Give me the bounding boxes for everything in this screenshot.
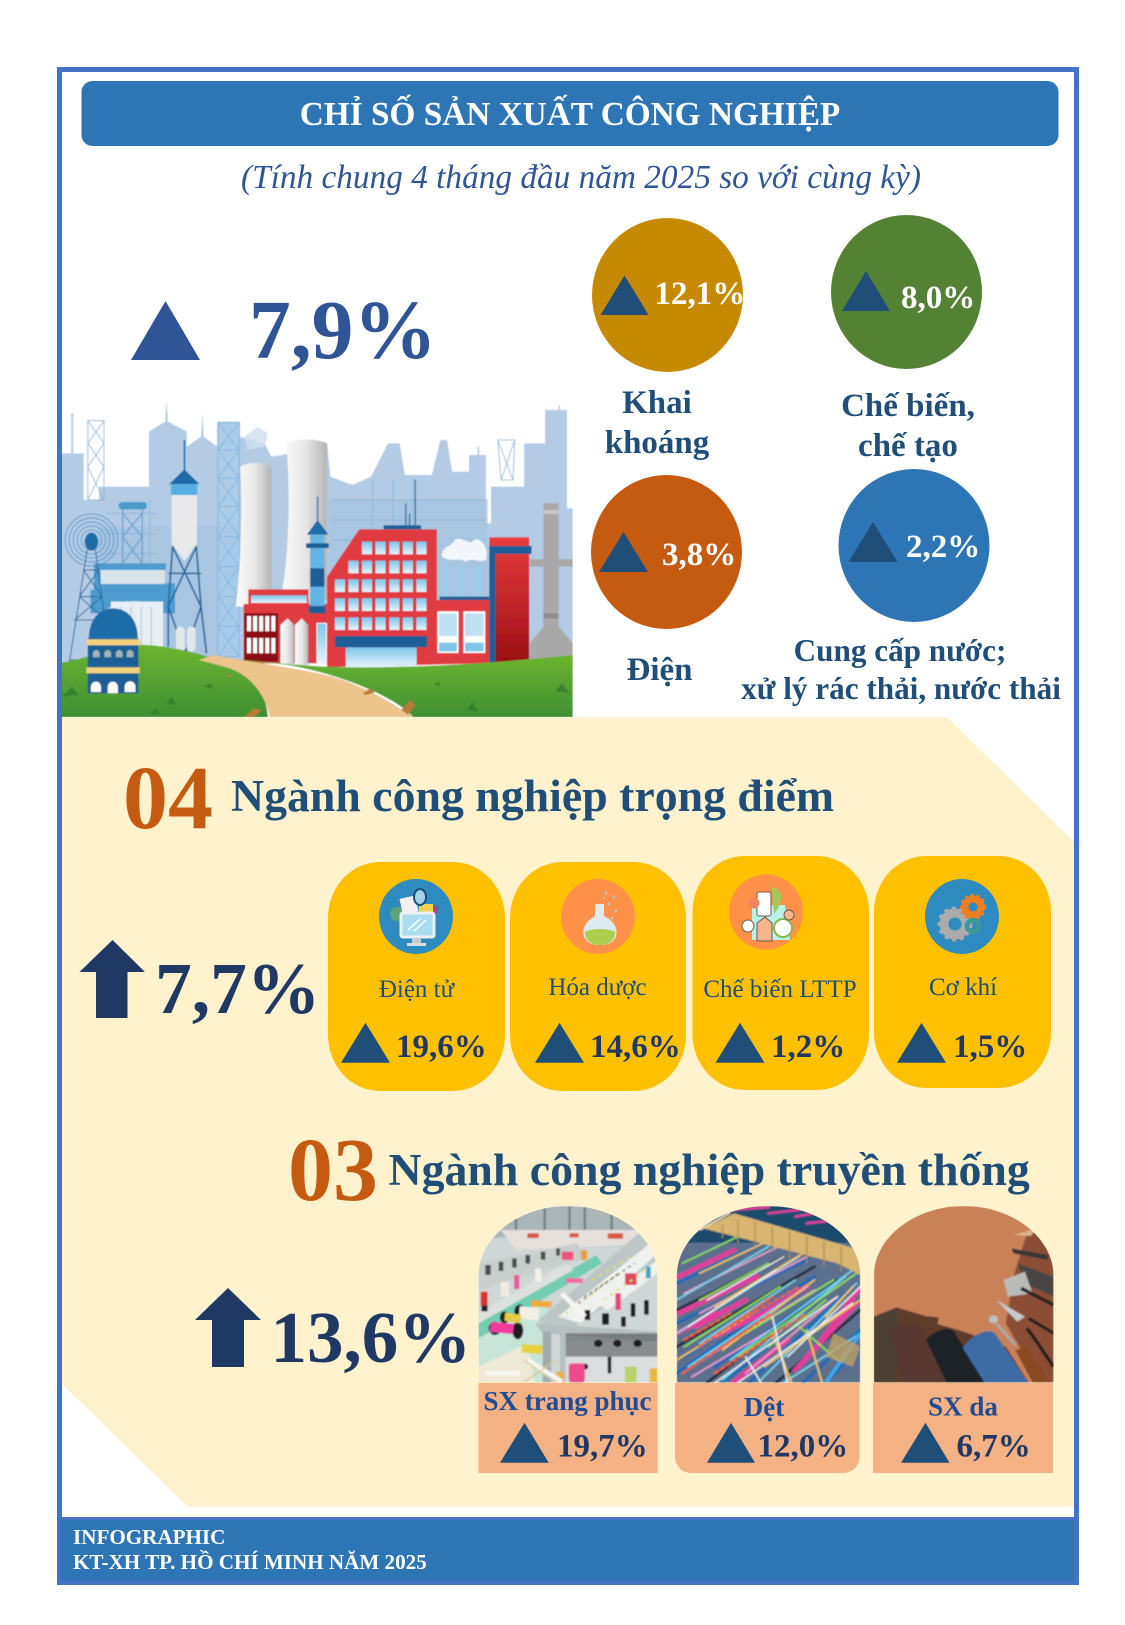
icon: computer (379, 879, 453, 954)
card: Che bien LTTP: 1,2% (771, 1029, 845, 1065)
icon: flask (561, 879, 635, 954)
card: Dien tu (328, 862, 505, 1091)
caption: SX da: SX da (928, 1392, 998, 1422)
heading: 04 key industries: 04 (123, 749, 213, 848)
card: Co khi: 1,5% (953, 1029, 1027, 1065)
caption: SX da (873, 1383, 1053, 1473)
label: Dien: Điện (626, 652, 692, 688)
photo: leather tools (874, 1206, 1054, 1383)
overall value: 7,9% (249, 285, 437, 377)
heading: 03 traditional industries (288, 1121, 1030, 1220)
heading: 03 traditional industries: Ngành công nghiệp truyền thống (388, 1144, 1030, 1195)
headline figure: overall growth (131, 285, 437, 377)
photo: garment factory (478, 1206, 658, 1383)
caption: SX trang phuc (478, 1383, 658, 1473)
footer bar: INFOGRAPHIC (73, 1525, 225, 1549)
card: Dien tu: Điện tử (379, 976, 456, 1003)
caption: Det: Dệt (744, 1392, 784, 1422)
footer bar: KT-XH TP. HỒ CHÍ MINH NĂM 2025 (73, 1550, 427, 1574)
stat circle: Dien: 3,8% (662, 537, 736, 573)
key industries total (80, 940, 320, 1029)
heading: 04 key industries (123, 749, 834, 848)
icon: up arrow (195, 1288, 261, 1367)
cream panel (60, 717, 1077, 1507)
photo: weaving threads (677, 1206, 860, 1383)
footer bar (59, 1518, 1076, 1582)
title banner: CHỈ SỐ SẢN XUẤT CÔNG NGHIỆP (300, 94, 840, 133)
card: Che bien LTTP: Chế biến LTTP (703, 976, 857, 1003)
stat circle: Cung cap nuoc: 2,2% (906, 529, 980, 565)
title banner (82, 81, 1058, 146)
label: Che bien, che tao: Chế biến, (841, 388, 975, 424)
caption: Det (675, 1383, 860, 1473)
icon: up triangle (131, 301, 200, 360)
caption: SX trang phuc: 19,7% (557, 1428, 648, 1464)
caption: SX trang phuc: SX trang phục (483, 1386, 652, 1416)
card: Dien tu: 19,6% (396, 1029, 487, 1065)
key industries total: 7,7% (155, 948, 320, 1029)
label: Khai khoang: khoáng (605, 425, 710, 461)
subtitle: (Tính chung 4 tháng đầu năm 2025 so với cùng kỳ) (241, 159, 921, 196)
stat circle: Che bien che tao: 8,0% (901, 280, 975, 316)
stat circle: Dien (591, 475, 742, 629)
label: Cung cap nuoc: Cung cấp nước; (794, 633, 1006, 668)
label: Khai khoang: Khai (622, 385, 692, 421)
heading: 03 traditional industries: 03 (288, 1121, 378, 1220)
stat circle: Cung cap nuoc (838, 469, 990, 622)
caption: SX da: 6,7% (956, 1428, 1031, 1464)
traditional industries total (195, 1288, 471, 1378)
heading: 04 key industries: Ngành công nghiệp trọng điểm (231, 770, 834, 821)
icon: up arrow (80, 940, 145, 1018)
illustration: industrial city (58, 400, 573, 717)
traditional industries total: 13,6% (270, 1297, 471, 1378)
card: Che bien LTTP (692, 856, 869, 1090)
card: Hoa duoc (510, 862, 686, 1091)
label: Cung cap nuoc: xử lý rác thải, nước thải (741, 671, 1061, 706)
stat circle: Che bien che tao (831, 215, 982, 369)
icon: food processing (729, 874, 803, 950)
icon: gears (925, 879, 999, 954)
card: Co khi: Cơ khí (929, 974, 997, 1001)
label: Che bien, che tao: chế tạo (858, 428, 958, 464)
card: Co khi (874, 856, 1051, 1088)
stat circle: Khai khoang (592, 218, 745, 372)
stat circle: Khai khoang: 12,1% (654, 276, 745, 312)
card: Hoa duoc: Hóa dược (548, 974, 647, 1001)
card: Hoa duoc: 14,6% (590, 1029, 681, 1065)
caption: Det: 12,0% (758, 1428, 848, 1464)
